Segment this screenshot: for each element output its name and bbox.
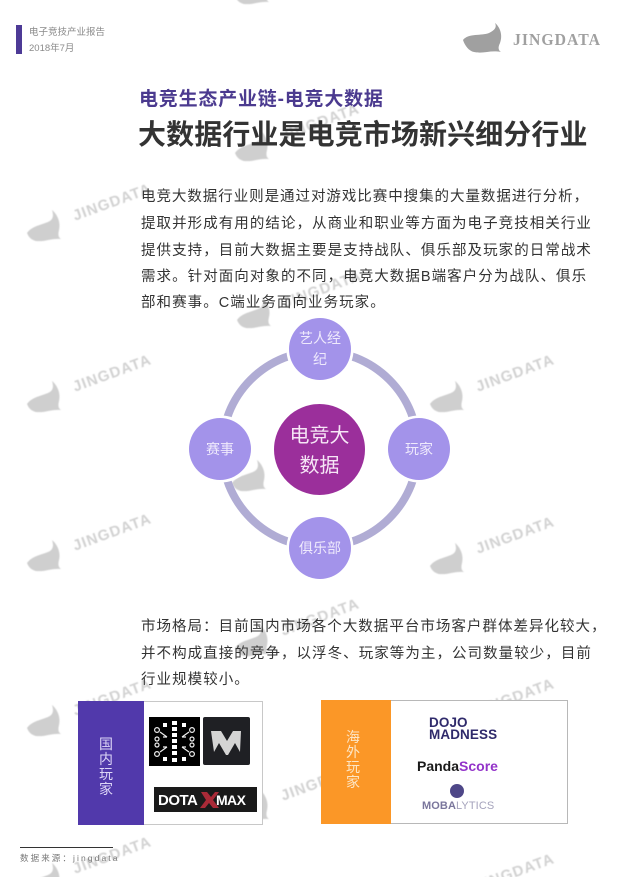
logo: Mobalytics — [422, 784, 494, 812]
report name: 电子竞技产业报告 — [29, 27, 105, 38]
logo: DOTAMAX: DOTA — [158, 792, 198, 809]
logo: PandaScore: PandaScore — [417, 758, 498, 774]
intro text block: 提供支持，目前大数据主要是支持战队、俱乐部及玩家的日常战术 — [141, 243, 592, 259]
node: events: 赛事 — [206, 440, 234, 456]
intro text block: 需求。针对面向对象的不同，电竞大数据B端客户分为战队、俱乐 — [141, 269, 587, 285]
node: artist agency — [289, 318, 351, 380]
node: clubs: 俱乐部 — [299, 540, 341, 556]
intro text block: 部和赛事。C端业务面向业务玩家。 — [141, 295, 386, 311]
connecting ring — [224, 352, 416, 546]
center node — [274, 404, 365, 495]
logo: network emblem — [149, 717, 200, 766]
panel label — [321, 700, 391, 824]
intro text block: 提取并形成有用的结论，从商业和职业等方面为电子竞技相关行业 — [141, 216, 592, 232]
market text block: 行业规模较小。 — [141, 672, 250, 688]
cycle diagram — [189, 318, 450, 579]
logo: DOTAMAX — [154, 787, 257, 812]
center node: 电竞大 — [290, 424, 350, 446]
panel label — [78, 701, 144, 825]
logo: Dojo Madness: MADNESS — [429, 727, 497, 742]
logo: DOTAMAX: MAX — [216, 792, 247, 808]
node: events — [189, 418, 251, 480]
panel label: 海外玩家 — [346, 729, 360, 790]
accent bar — [16, 25, 22, 54]
mobalytics wordmark: MOBALYTICS — [422, 800, 494, 812]
panel: domestic players — [78, 701, 263, 825]
center node: 数据 — [300, 454, 340, 476]
logo: M — [203, 717, 250, 765]
panel label: 国内玩家 — [99, 736, 113, 797]
mobalytics emblem — [450, 784, 464, 798]
logo: Dojo Madness: DOJO — [429, 715, 468, 730]
intro text block: 电竞大数据行业则是通过对游戏比赛中搜集的大量数据进行分析， — [141, 189, 589, 205]
logo: JINGDATA — [463, 23, 601, 53]
market text block — [141, 618, 607, 688]
footer rule — [20, 847, 113, 848]
header: report label — [16, 25, 105, 54]
node: artist agency: 艺人经 — [299, 330, 341, 346]
node: players: 玩家 — [405, 440, 433, 456]
source text: 数据来源：jingdata — [20, 853, 120, 863]
report date: 2018年7月 — [29, 43, 74, 54]
market text block: 市场格局：目前国内市场各个大数据平台市场客户群体差异化较大， — [141, 619, 607, 635]
title: 大数据行业是电竞市场新兴细分行业 — [138, 119, 588, 150]
intro text block — [141, 188, 592, 311]
subtitle: 电竞生态产业链-电竞大数据 — [139, 89, 384, 110]
logo: Dojo Madness — [429, 715, 497, 742]
node: clubs — [289, 517, 351, 579]
node: artist agency: 纪 — [313, 351, 327, 367]
market text block: 并不构成直接的竞争，以浮冬、玩家等为主，公司数量较少，目前 — [141, 646, 592, 662]
panel: overseas players — [321, 700, 568, 824]
node: players — [388, 418, 450, 480]
